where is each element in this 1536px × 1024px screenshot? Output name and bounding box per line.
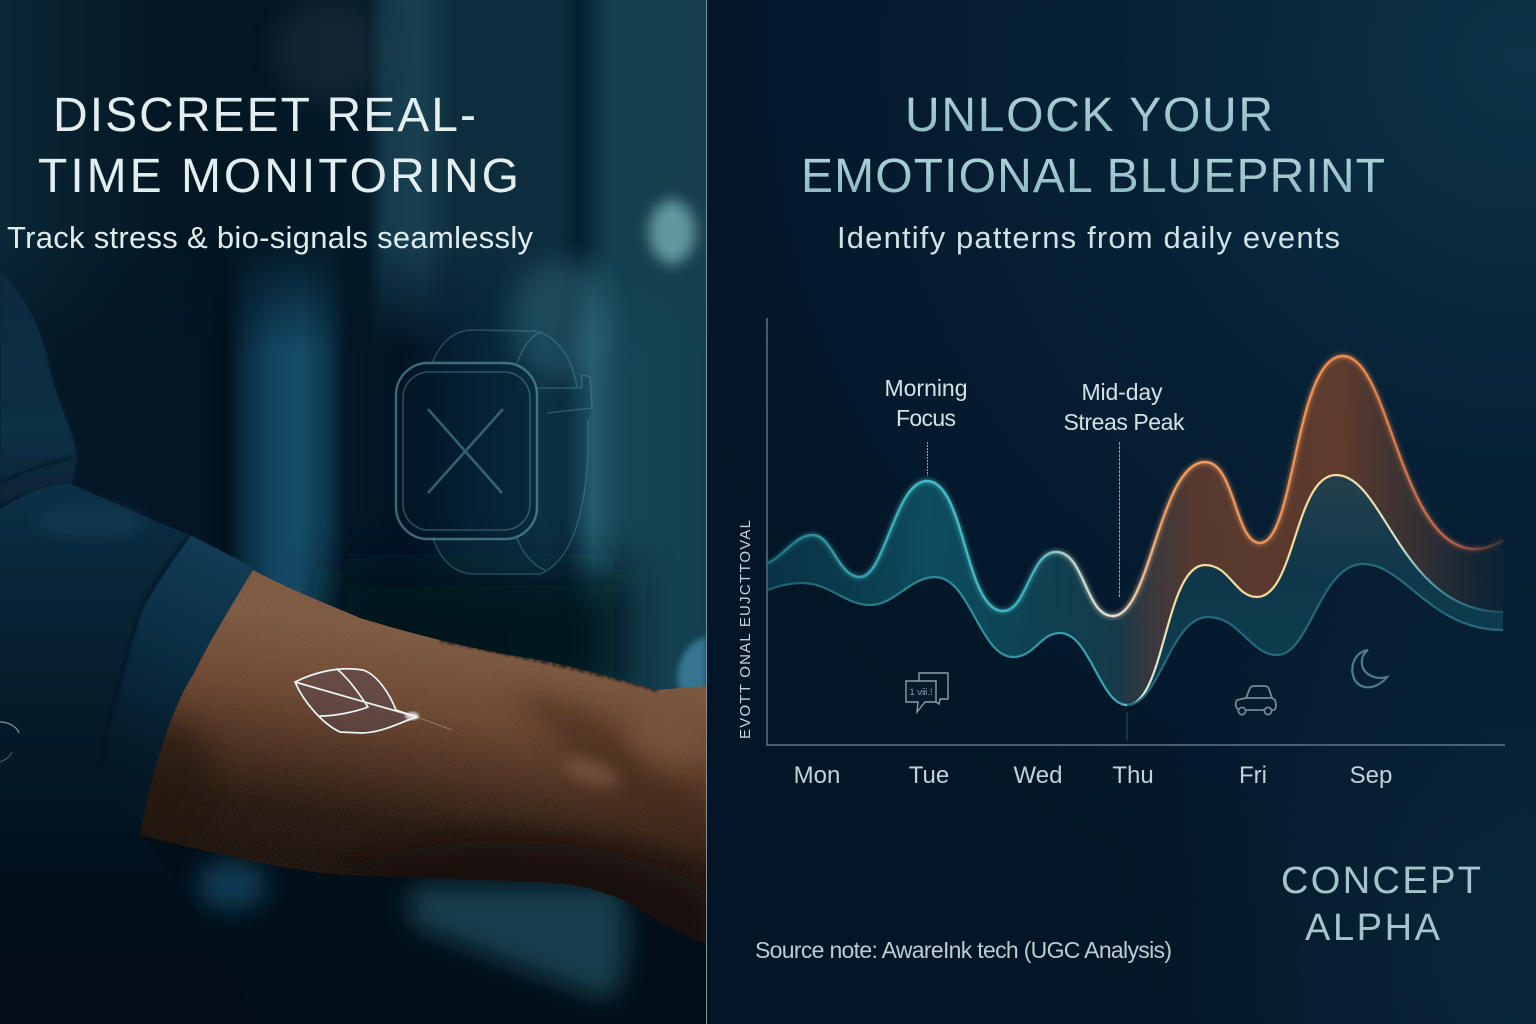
curve: upper line	[768, 356, 1503, 616]
subheading: track stress: Track stress & bio-signals seamlessly	[7, 220, 534, 255]
x axis day labels: Thu	[1112, 762, 1154, 789]
heading: discreet real-time monitoring: TIME MONITORING	[38, 150, 519, 203]
heading: unlock your emotional blueprint: EMOTIONAL BLUEPRINT	[801, 150, 1385, 203]
chart axes	[767, 318, 1505, 745]
heading: unlock your emotional blueprint	[801, 89, 1385, 203]
callout: mid-day stress peak	[1064, 379, 1185, 597]
chart: emotional waves by day	[737, 300, 1505, 789]
x axis day labels: Tue	[909, 762, 949, 789]
icon: crossed-out smartwatch	[396, 330, 592, 574]
right background	[706, 0, 1536, 1024]
icon: moon	[1352, 650, 1387, 687]
y axis label: EVOTT ONAL EUJCTTOVAL	[737, 520, 754, 739]
x axis day labels: Wed	[1014, 762, 1062, 789]
callout: morning focus: Morning	[884, 375, 968, 401]
icon: chat bubbles	[906, 673, 948, 712]
callout: morning focus	[884, 375, 968, 476]
divider line between panels	[706, 0, 707, 1024]
icon: car	[1236, 686, 1276, 715]
subheading: identify patterns: Identify patterns from daily events	[837, 220, 1340, 255]
curve: middle line	[768, 475, 1503, 705]
brand: concept alpha: ALPHA	[1305, 907, 1441, 949]
x axis day labels	[794, 762, 1392, 789]
source note: Source note: AwareInk tech (UGC Analysis)	[755, 937, 1172, 963]
forearm skin	[130, 560, 712, 960]
band: lower emotional range	[1146, 476, 1503, 692]
x axis day labels: Mon	[794, 762, 840, 789]
callout: mid-day stress peak: Mid-day	[1082, 379, 1163, 405]
curve: lower line	[1127, 564, 1503, 705]
panel: right emotional chart	[706, 0, 1536, 1024]
heading: discreet real-time monitoring	[39, 97, 516, 192]
brand: concept alpha: CONCEPT	[1281, 860, 1481, 902]
brand: concept alpha	[1281, 860, 1481, 949]
panel: left photo of wrist with ink	[0, 0, 712, 1024]
callout: morning focus: Focus	[896, 405, 956, 431]
photo background: blurred shirt and office	[0, 0, 706, 1024]
x axis day labels: Fri	[1239, 762, 1267, 789]
heading: discreet real-time monitoring: DISCREET REAL-	[53, 89, 476, 142]
icon: glowing leaf ink	[295, 669, 452, 733]
x axis day labels: Sep	[1350, 762, 1392, 789]
icon: chat bubbles: 1 ⅷ.!	[909, 687, 933, 697]
jacket sleeve	[0, 274, 252, 834]
callout: mid-day stress peak: Streas Peak	[1064, 409, 1185, 435]
heading: unlock your emotional blueprint: UNLOCK YOUR	[905, 89, 1273, 142]
band: upper emotional range	[768, 357, 1492, 704]
